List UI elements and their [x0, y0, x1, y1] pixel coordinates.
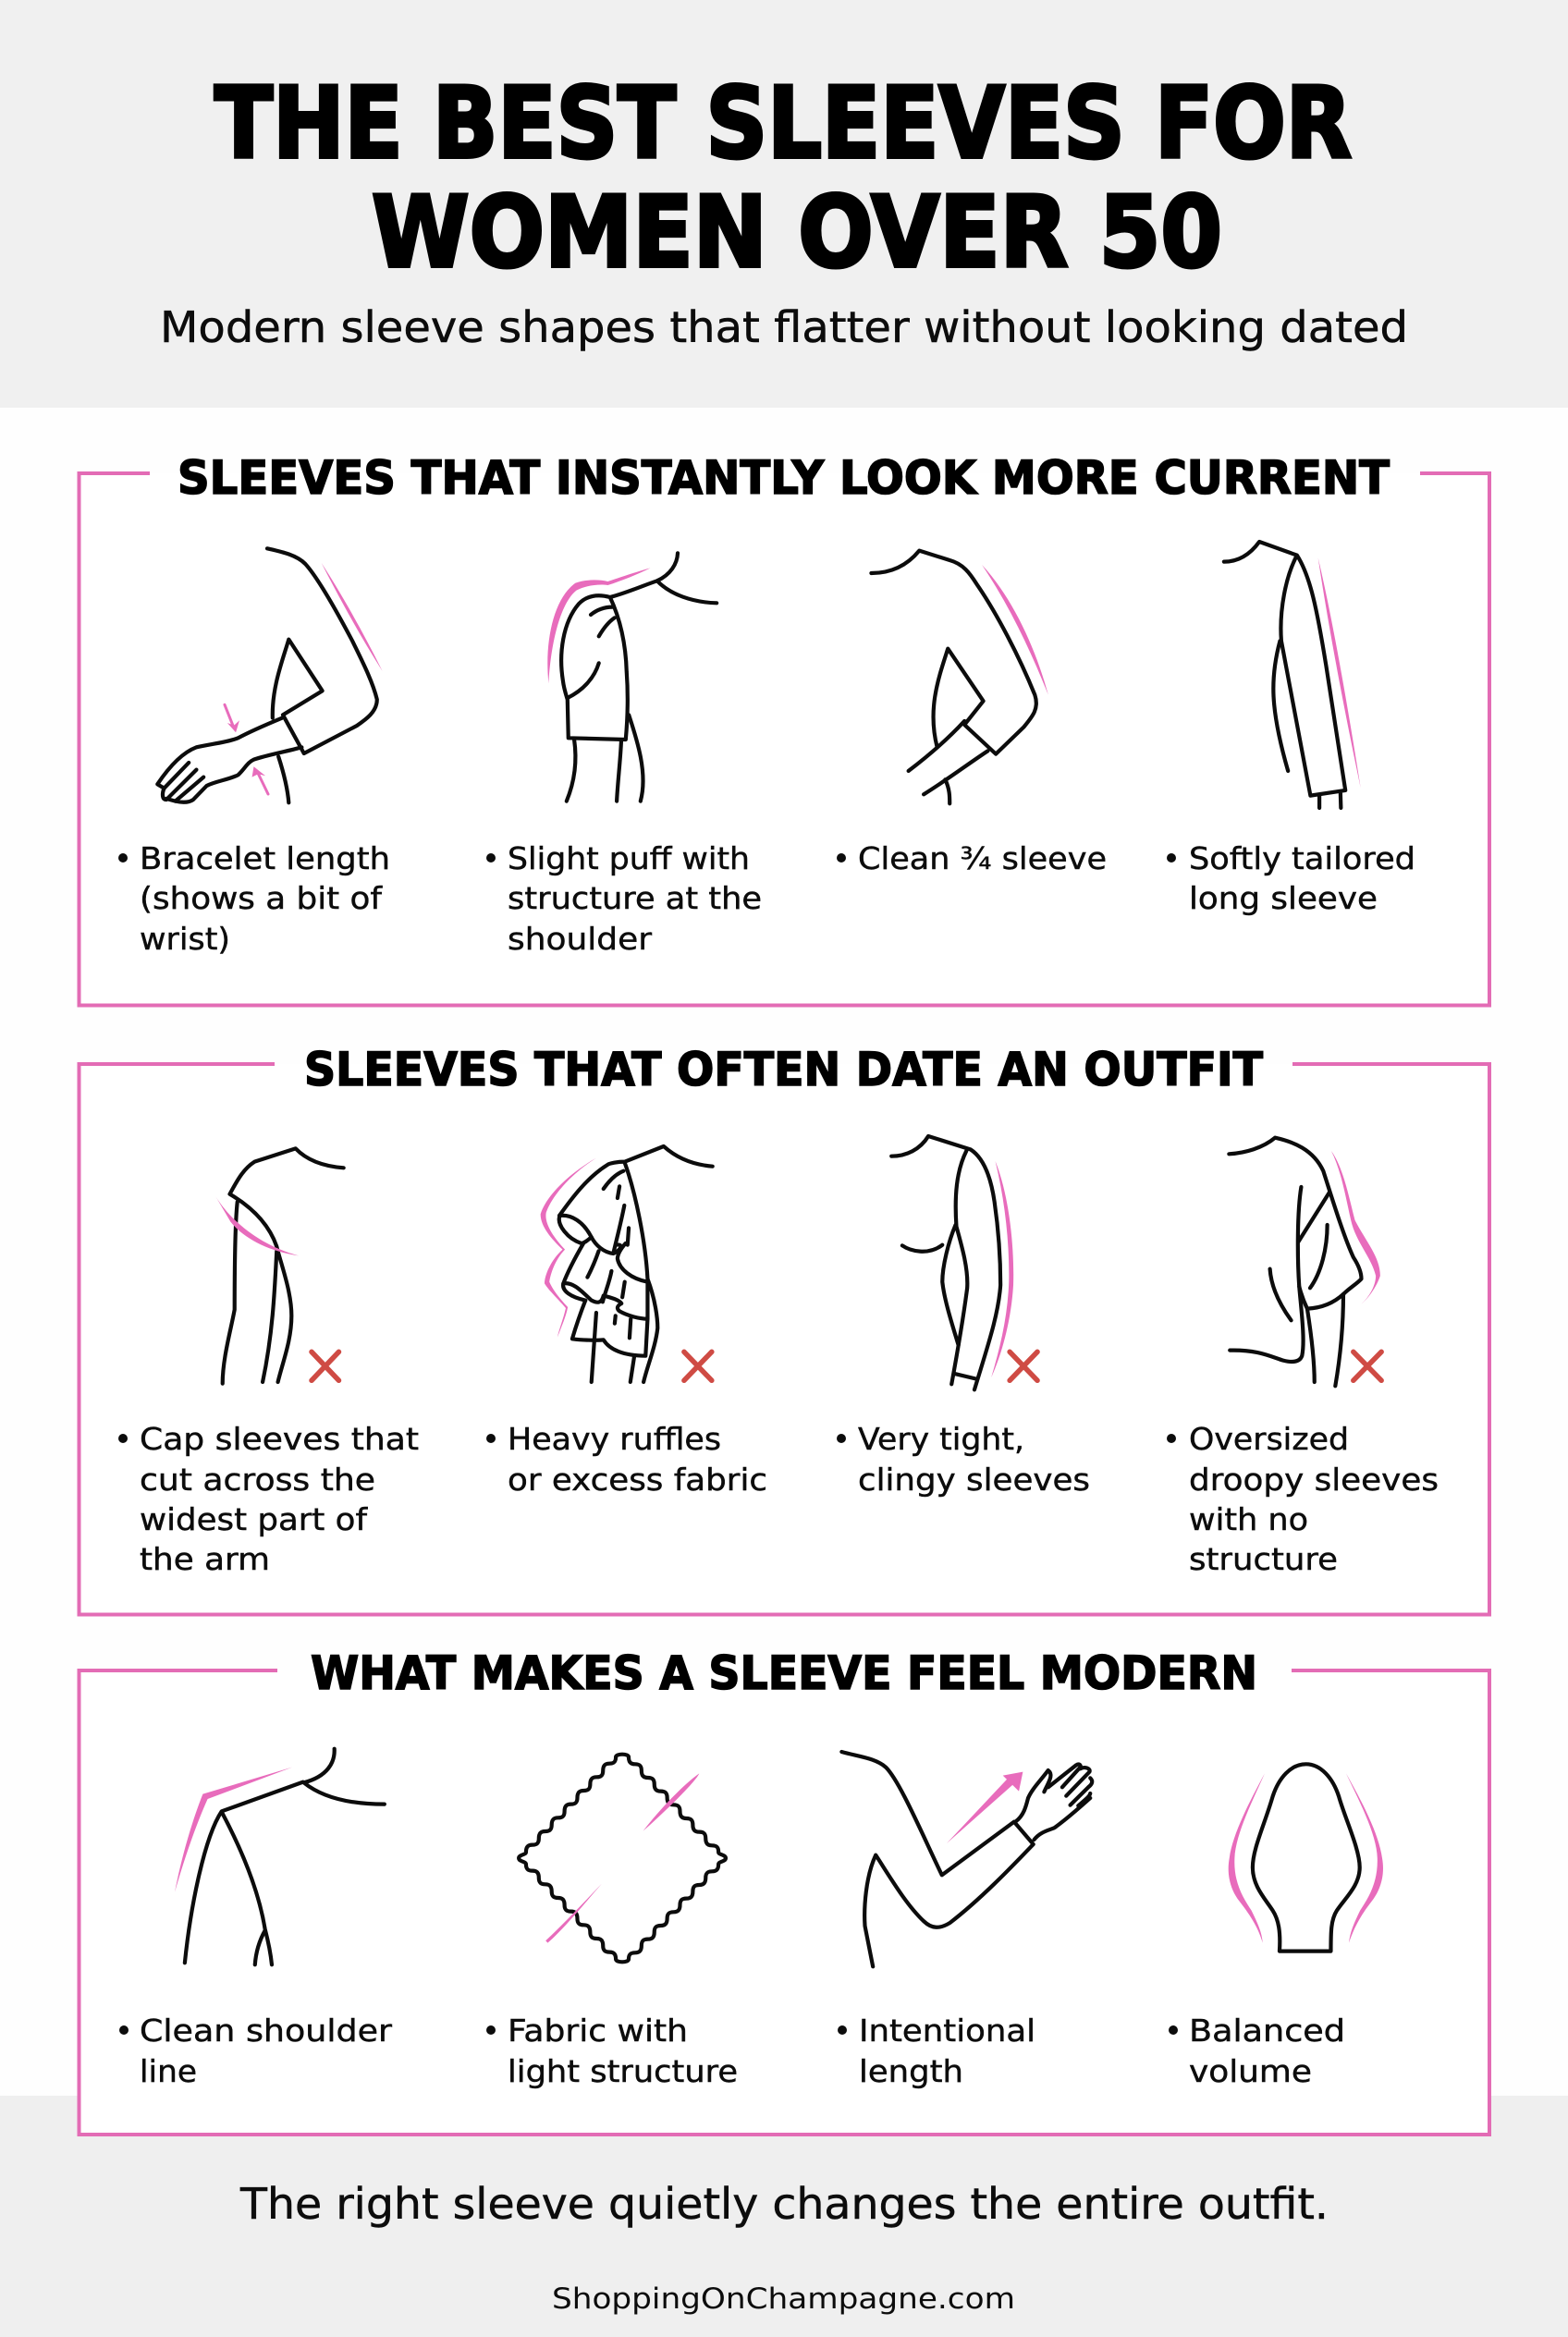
label: cap sleeves [118, 1421, 419, 1577]
title [214, 67, 1352, 289]
label: fabric with structure [486, 2013, 738, 2089]
label: heavy ruffles [486, 1421, 767, 1498]
icon: slight puff sleeve [547, 553, 717, 801]
label: slight puff: shoulder [508, 921, 652, 957]
icon: droopy sleeve [1229, 1138, 1381, 1386]
footer band [0, 2096, 1568, 2337]
label: fabric with structure: light structure [508, 2053, 738, 2089]
item: softly tailored [1167, 542, 1415, 916]
label: balanced volume: volume [1189, 2053, 1312, 2089]
heading: modern: WHAT MAKES A SLEEVE FEEL MODERN [311, 1646, 1257, 1700]
item: clean shoulder [119, 1749, 392, 2089]
label: cap sleeves: Cap sleeves that [140, 1421, 419, 1457]
label: intentional length: length [859, 2053, 963, 2089]
label: bracelet length: wrist) [140, 921, 230, 957]
label: bracelet length: (shows a bit of [140, 880, 383, 916]
item: oversized droopy [1167, 1138, 1439, 1577]
label: heavy ruffles: Heavy ruffles [508, 1421, 721, 1457]
label: fabric with structure: Fabric with [508, 2013, 688, 2049]
label: very tight: clingy sleeves [858, 1462, 1090, 1498]
label: oversized droopy: droopy sleeves [1189, 1462, 1439, 1498]
label: intentional length: Intentional [859, 2013, 1035, 2049]
subtitle: Modern sleeve shapes that flatter without looking dated [160, 302, 1408, 352]
icon: fabric swatch [519, 1755, 726, 1962]
item: bracelet length [118, 548, 390, 957]
label: oversized droopy: structure [1189, 1541, 1338, 1577]
panel: sleeves that look current [80, 451, 1489, 1006]
panel: sleeves that date an outfit [80, 1043, 1489, 1614]
label: cap sleeves: widest part of [140, 1501, 368, 1537]
item: cap sleeves [118, 1148, 419, 1577]
title: WOMEN OVER 50 [372, 176, 1222, 289]
label: softly tailored: Softly tailored [1189, 840, 1415, 876]
item: balanced volume [1169, 1764, 1383, 2089]
closing statement: The right sleeve quietly changes the entire outfit. [239, 2179, 1329, 2229]
website credit: ShoppingOnChampagne.com [552, 2282, 1015, 2316]
icon: clean shoulder line [175, 1749, 385, 1964]
label: heavy ruffles: or excess fabric [508, 1462, 767, 1498]
label: very tight: Very tight, [858, 1421, 1024, 1457]
label: clean shoulder [119, 2013, 392, 2089]
label: intentional length [838, 2013, 1035, 2089]
title: THE BEST SLEEVES FOR [214, 67, 1352, 180]
panel: what makes a sleeve modern [80, 1646, 1489, 2135]
label: oversized droopy: with no [1189, 1501, 1308, 1537]
item: very tight [837, 1136, 1090, 1498]
label: softly tailored: long sleeve [1189, 880, 1378, 916]
item: fabric with structure [486, 1755, 738, 2089]
label: softly tailored [1167, 840, 1415, 916]
label: oversized droopy [1167, 1421, 1439, 1577]
item: slight puff [486, 553, 762, 957]
header band [0, 0, 1568, 408]
item: clean three-quarter [837, 551, 1107, 876]
icon: three-quarter sleeve [871, 551, 1048, 803]
icon: tight sleeve [891, 1136, 1037, 1389]
label: slight puff: Slight puff with [508, 840, 750, 876]
icon: cap sleeve [215, 1148, 344, 1384]
label: balanced volume: Balanced [1189, 2013, 1345, 2049]
label: clean shoulder: Clean shoulder [140, 2013, 392, 2049]
label: bracelet length: Bracelet length [140, 840, 390, 876]
label: clean shoulder: line [140, 2053, 197, 2089]
label: cap sleeves: cut across the [140, 1462, 375, 1498]
icon: bracelet length arm [157, 548, 383, 802]
item: intentional length [838, 1752, 1092, 2089]
heading: current: SLEEVES THAT INSTANTLY LOOK MORE CURRENT [178, 451, 1390, 505]
label: bracelet length [118, 840, 390, 957]
icon: tailored long sleeve [1224, 542, 1361, 808]
label: cap sleeves: the arm [140, 1541, 270, 1577]
icon: raised arm with arrow [841, 1752, 1092, 1966]
label: balanced volume [1169, 2013, 1345, 2089]
heading: date an outfit: SLEEVES THAT OFTEN DATE AN OUTFIT [304, 1043, 1263, 1096]
icon: ruffled sleeve [541, 1146, 713, 1382]
label: oversized droopy: Oversized [1189, 1421, 1349, 1457]
label: slight puff [486, 840, 762, 957]
icon: balanced silhouette [1229, 1764, 1383, 1952]
item: heavy ruffles [486, 1146, 767, 1498]
label: very tight [837, 1421, 1090, 1498]
label: slight puff: structure at the [508, 880, 762, 916]
label: clean three-quarter: Clean ¾ sleeve [858, 840, 1107, 876]
